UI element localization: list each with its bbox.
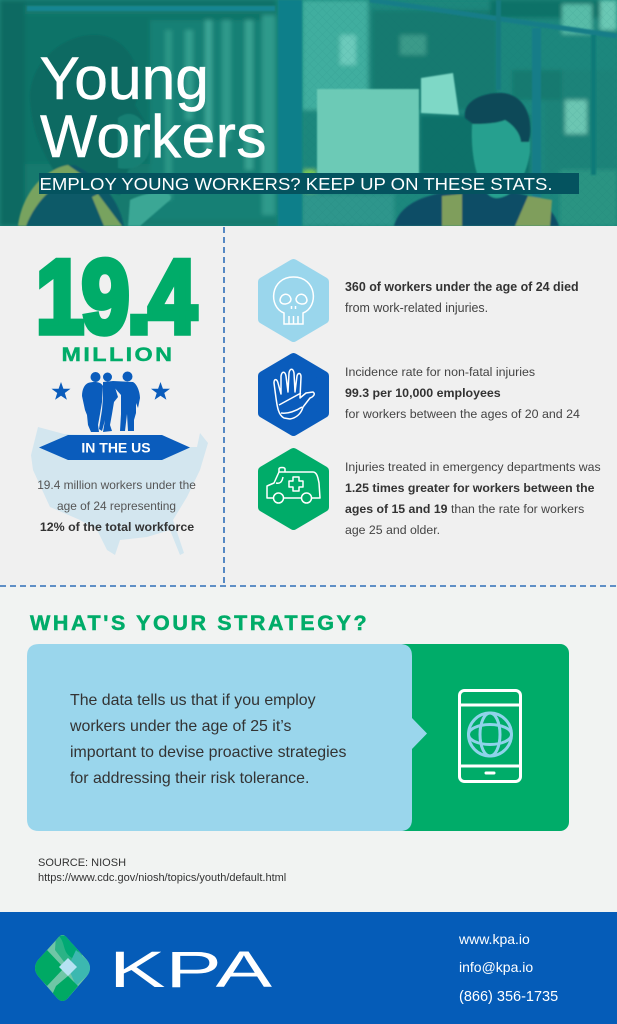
icon: smartphone with globe [460,690,520,782]
callout text [69,692,347,787]
title [40,57,265,158]
statistic 2 text: Incidence rate for non-fatal injuries [345,365,535,379]
stat description: 19.4 million workers under the [37,478,196,492]
statistic 2 text: 99.3 per 10,000 employees [345,386,501,400]
million label: MILLION [62,344,174,366]
statistic 3 text: ages of 15 and 19 than the rate for workers [345,502,584,516]
source note [38,857,286,884]
icon: injured hand hexagon [263,358,324,431]
callout text: workers under the age of 25 it’s [69,718,291,735]
left worker [30,35,150,195]
callout text: important to devise proactive strategies [70,744,347,761]
statistic 3 text: age 25 and older. [345,523,440,537]
statistic 1 text: 360 of workers under the age of 24 died [345,280,579,294]
icon: skull hexagon [263,264,324,337]
statistic 3 text [345,460,601,537]
contact details: (866) 356-1735 [459,989,558,1005]
statistic 1 text [345,280,579,315]
panel: strategy callout [27,644,569,831]
panel: 19.4 million stat [31,239,208,555]
callout text: The data tells us that if you employ [70,692,316,709]
big number: 19.4 [36,239,196,355]
US map silhouette [31,427,208,555]
section divider lines [0,227,617,586]
title: Young [40,44,209,112]
heading: strategy: WHAT'S YOUR STRATEGY? [30,611,369,635]
source note: SOURCE: NIOSH [38,857,126,869]
statistic 3 text: 1.25 times greater for workers between the [345,481,595,495]
subtitle band: EMPLOY YOUNG WORKERS? KEEP UP ON THESE STATS. [40,174,552,194]
statistic 3 text: Injuries treated in emergency departments was [345,460,601,474]
banner: in the us: IN THE US [81,440,151,456]
statistic 2 text [345,365,580,421]
contact details: www.kpa.io [458,931,530,947]
statistic 1 text: from work-related injuries. [345,301,488,315]
icon: ambulance hexagon [263,453,324,525]
logo wordmark: KPA [109,941,272,998]
icon: KPA logo diamond [35,935,90,1001]
header photo banner [0,0,617,226]
contact details: info@kpa.io [459,959,533,975]
panel: injury statistics [263,264,601,537]
stat description: age of 24 representing [57,499,176,513]
right worker [394,194,560,226]
stars [52,382,170,400]
stat description [37,478,196,534]
source note: https://www.cdc.gov/niosh/topics/youth/default.html [38,872,286,884]
statistic 2 text: for workers between the ages of 20 and 24 [345,407,580,421]
icon: three workers [82,372,140,432]
title: Workers [40,102,267,170]
callout text: for addressing their risk tolerance. [70,770,309,787]
stat description: 12% of the total workforce [40,520,194,534]
footer [0,912,617,1024]
banner: in the us [39,435,190,460]
contact details [458,931,558,1005]
